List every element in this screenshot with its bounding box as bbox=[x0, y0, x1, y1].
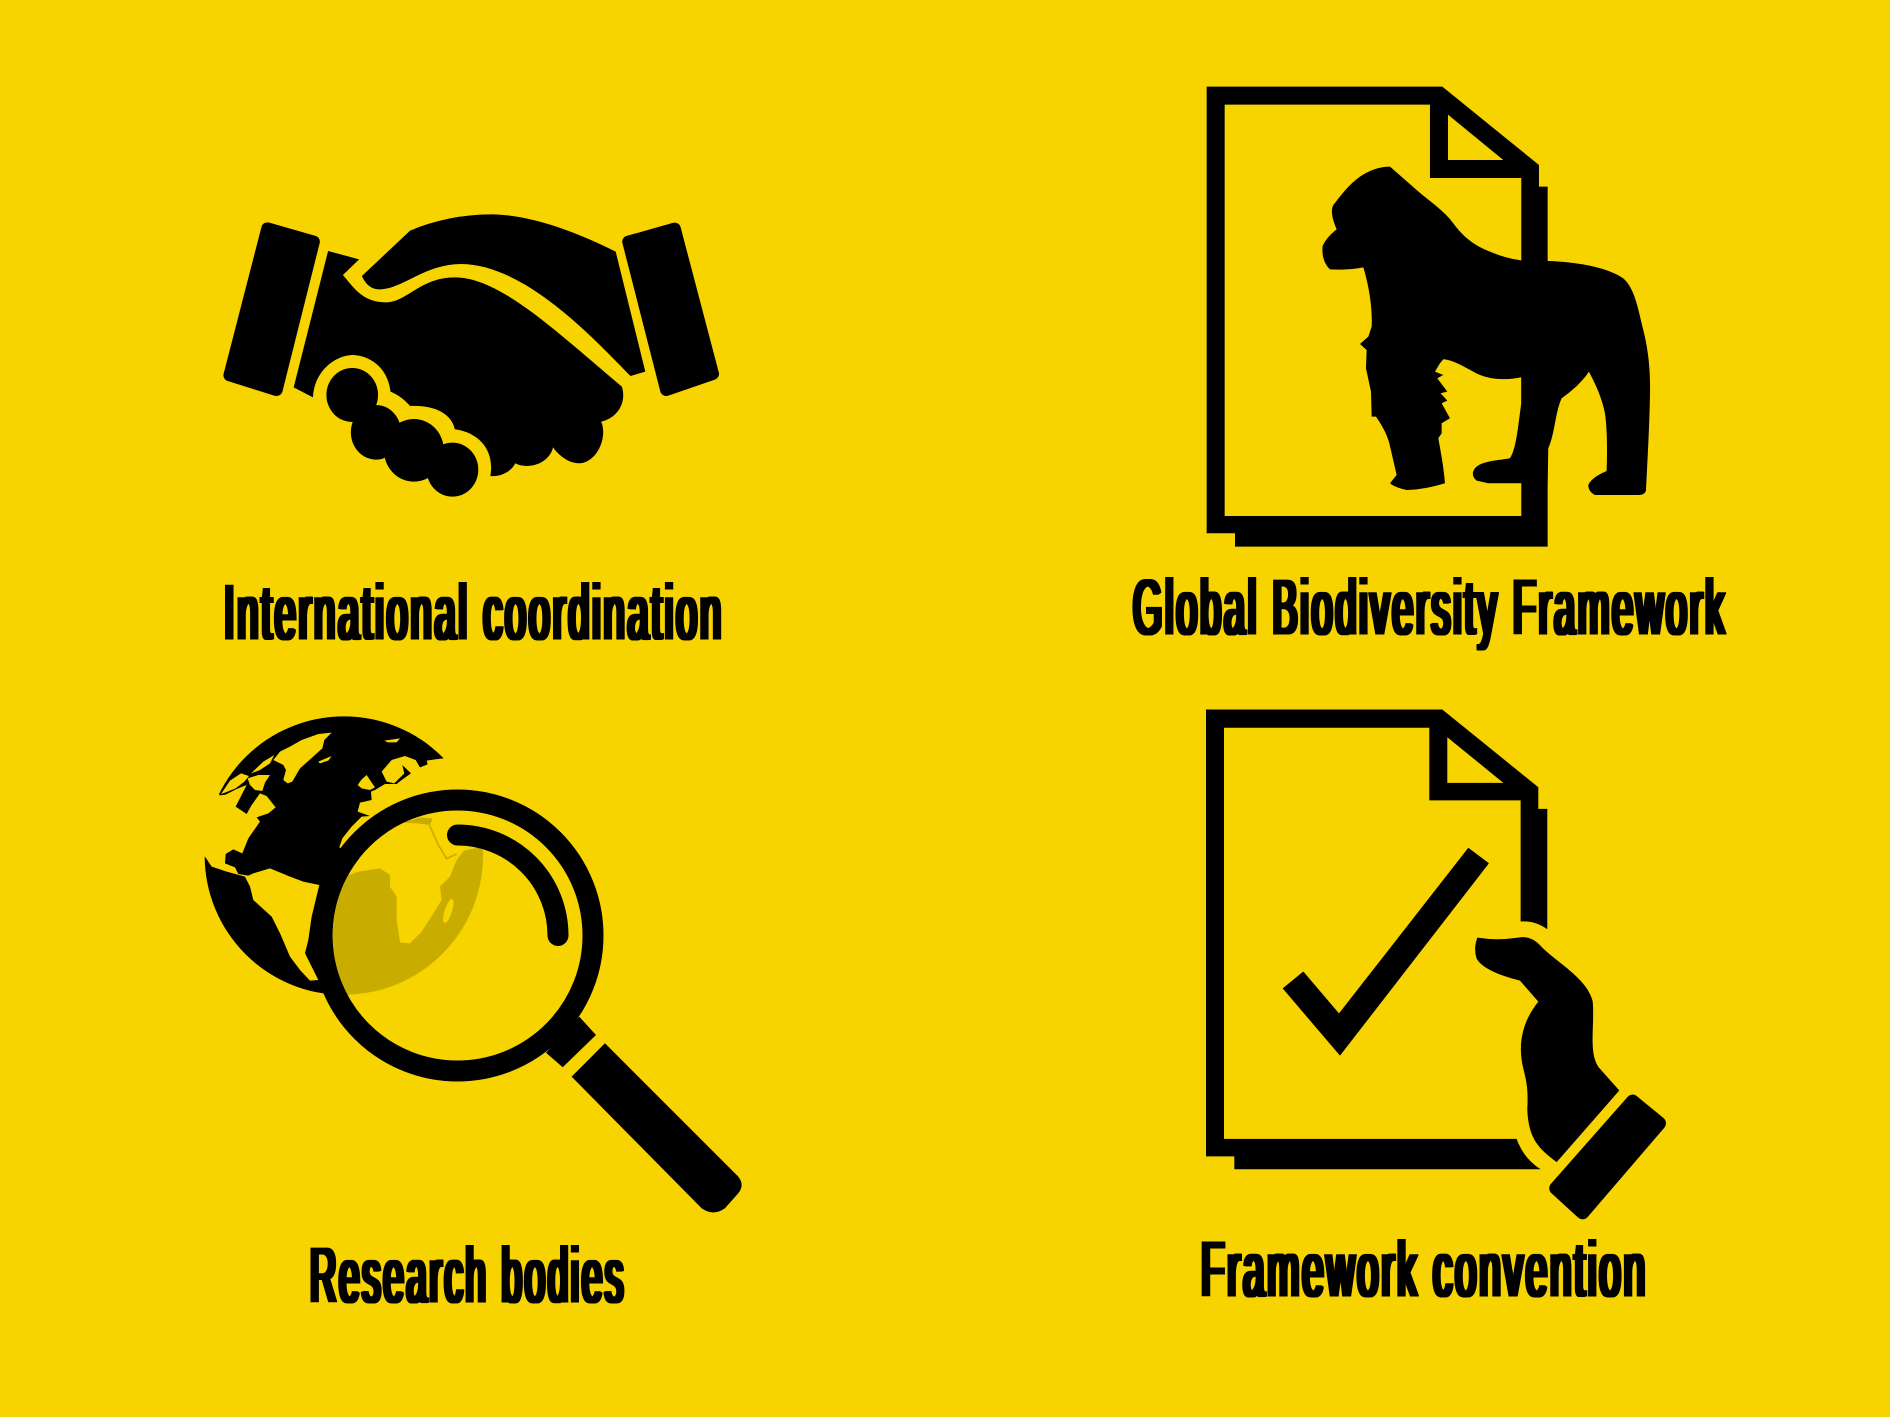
icon: document with check mark held by hand bbox=[1206, 709, 1659, 1213]
magnifying glass bbox=[322, 800, 742, 1212]
icon: globe with magnifying glass bbox=[185, 716, 742, 1212]
infographic canvas: Research bodies bbox=[310, 1231, 626, 1319]
infographic canvas: International coordination bbox=[224, 568, 724, 656]
icon: document with gorilla bbox=[1207, 87, 1650, 547]
icon: handshake bbox=[230, 214, 713, 497]
lens interior with shaded globe bbox=[332, 818, 483, 995]
infographic canvas bbox=[204, 86, 1727, 1304]
globe bbox=[185, 716, 505, 995]
